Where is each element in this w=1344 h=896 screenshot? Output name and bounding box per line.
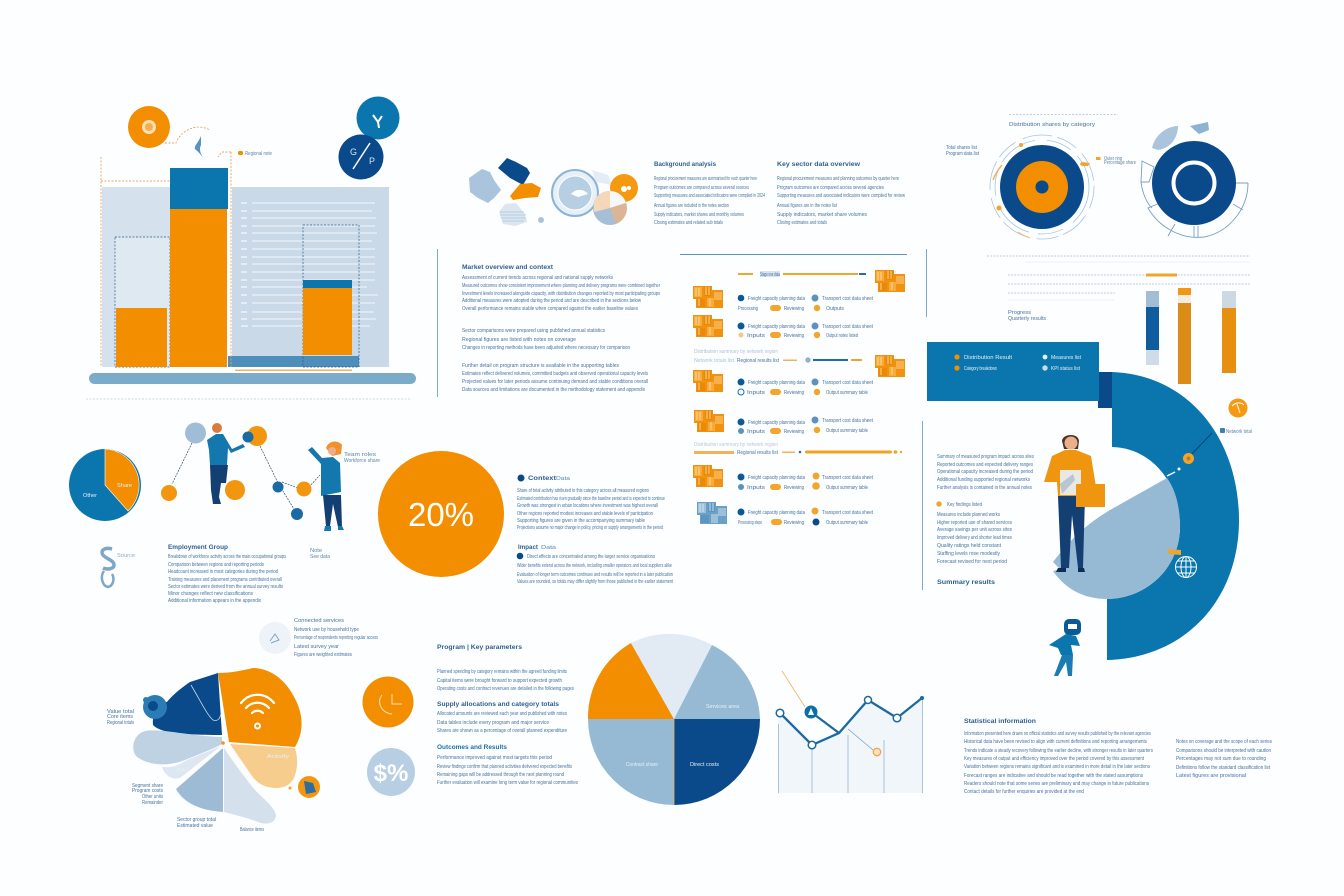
small caption — [1008, 310, 1046, 322]
sector: orange — [588, 643, 674, 719]
big percent circle — [378, 451, 504, 577]
row 4: Inputs — [747, 429, 765, 435]
text block: bottom centre: Allocated amounts are reviewed each year and published with notes — [437, 711, 567, 717]
callout label: Network total — [1226, 429, 1252, 435]
text block: percent details: Impact — [518, 544, 539, 551]
icon: s-shape label — [102, 548, 135, 587]
legend box: Measures list — [1051, 355, 1081, 361]
text block: left column: Changes in reporting methods have been adjusted where necessary for comparison — [462, 345, 630, 351]
top dotted header — [1009, 114, 1118, 128]
text block: right of figure: Higher reported use of shared services — [937, 520, 1012, 526]
text block: left column: Regional figures are listed with notes on coverage — [462, 337, 576, 343]
panel: logistics rows — [680, 254, 907, 526]
text block: percent details: Supporting figures are given in the accompanying summary table — [517, 518, 645, 524]
blue arc — [1107, 372, 1239, 660]
side note: Note — [310, 548, 322, 554]
text block: bottom centre: Review findings confirm that planned activities delivered expected benefits — [437, 764, 572, 770]
text block: bottom centre: Outcomes and Results — [437, 744, 507, 751]
text block: lower left: Training measures and placement programs contributed overall — [168, 577, 282, 583]
pie chart: small: Other — [83, 493, 97, 499]
timeline 3: Regional results list — [737, 450, 778, 456]
text block: top column 2: Supply indicators, market share volumes — [777, 212, 867, 218]
white row lines — [241, 203, 378, 326]
fan labels: Estimated value — [177, 823, 213, 829]
row 5: Inputs — [747, 485, 765, 491]
figure: small blue person — [1049, 619, 1081, 676]
fan labels — [107, 709, 264, 833]
row 2: Inputs — [747, 333, 765, 339]
small icon circle with notes: Percentage of respondents reporting regular access — [294, 635, 378, 641]
icon: dollar percent circle: $% — [374, 760, 408, 787]
orange ball icon — [288, 776, 320, 798]
text block: lower right — [964, 718, 1153, 795]
text block: left column: Sector comparisons were prepared using published annual statistics — [462, 328, 605, 334]
fan labels: Value total — [107, 709, 134, 715]
row 4: Freight capacity planning data — [748, 420, 806, 426]
pie chart: small: Share — [117, 483, 132, 489]
row 3: Reviewing — [784, 390, 804, 396]
row 4: Reviewing — [784, 429, 804, 435]
small caption: Progress — [1008, 310, 1031, 316]
side note — [310, 548, 331, 560]
donut 2 — [1152, 141, 1236, 225]
row 5: Transport cost data sheet — [822, 475, 873, 481]
figure label: Workforce share — [344, 458, 380, 464]
divider: dotted — [86, 398, 412, 400]
top dotted header: Distribution shares by category — [1009, 122, 1095, 128]
text block: lower right: Variation between regions remains significant and is examined in more detail in the later sections — [964, 764, 1150, 770]
pie chart: small — [69, 449, 141, 521]
text block: lower right: Trends indicate a steady recovery following the earlier decline, with stronger results in later quarters — [964, 748, 1153, 754]
text block: far right: Comparisons should be interpreted with caution — [1176, 748, 1271, 754]
area — [778, 698, 922, 793]
legend: donut 1: Outer ring — [1104, 156, 1122, 162]
text block: bottom centre: Remaining gaps will be addressed through the next planning round — [437, 772, 564, 778]
text block: percent details: Values are rounded, so totals may differ slightly from those published in the earlier statement — [517, 579, 673, 585]
donut 1 — [1000, 145, 1084, 229]
orange callout marks — [996, 143, 1100, 210]
donut 1 outer ring — [990, 135, 1094, 239]
sector: light left — [588, 719, 674, 805]
text block: lower right: Contact details for further enquiries are provided at the end — [964, 789, 1084, 795]
text block: percent details: Other regions reported modest increases and stable levels of participation — [517, 511, 653, 517]
figure label — [344, 452, 380, 464]
row 1: Reviewing — [784, 306, 804, 312]
legend box: Distribution Result — [964, 355, 1013, 361]
text block: top column 2 — [777, 161, 906, 226]
pie labels: Services area — [706, 704, 739, 710]
fan labels: Other units — [142, 794, 163, 800]
fan labels: Segment share — [132, 783, 163, 789]
crates: top right — [875, 270, 905, 292]
text block: left column: Data sources and limitations are documented in the methodology statement and appendix — [462, 387, 645, 393]
timeline 2: Network totals list — [694, 358, 734, 364]
sector: mid — [674, 645, 760, 719]
small pie — [593, 191, 627, 225]
text block: right of figure: Additional funding supported regional networks — [937, 477, 1030, 483]
orange header tab — [1146, 274, 1177, 276]
text block: top column 1: Closing estimates and related sub totals — [654, 220, 723, 226]
text block: lower left: Breakdown of workforce activity across the main occupational groups — [168, 554, 286, 560]
sector: pale — [631, 634, 712, 719]
figure: person with tablet — [1044, 435, 1105, 572]
vertical guides — [778, 698, 922, 793]
text block: left column: Projected values for later periods assume continuing demand and stable conditions overall — [462, 379, 648, 385]
row 5: Freight capacity planning data — [748, 475, 806, 481]
map: striped blob — [499, 203, 544, 226]
legend label — [238, 151, 272, 157]
pie labels: Direct costs — [690, 762, 719, 768]
row 2 — [693, 315, 873, 339]
text block: right of figure — [936, 454, 1034, 586]
text block: bottom centre: Program | Key parameters — [437, 644, 522, 651]
text block: lower left: Minor changes reflect new classifications — [168, 591, 253, 597]
fan labels: Core items — [107, 714, 133, 720]
sector: navy — [153, 673, 222, 735]
row 3: Inputs — [747, 390, 765, 396]
icon: wifi — [241, 695, 274, 728]
callout label — [1220, 428, 1252, 435]
small caption: Quarterly results — [1008, 316, 1046, 322]
text block: lower right: Readers should note that some series are preliminary and may change in future publications — [964, 781, 1149, 787]
text block: bottom centre: Further evaluation will examine long term value for regional communities — [437, 780, 578, 786]
sector: light blue — [133, 730, 222, 764]
text block: left column: Assessment of current trends across regional and national supply networks — [462, 275, 613, 281]
text block: percent details: Data — [541, 545, 557, 551]
text block: left column: Measured outcomes show consistent improvement where planning and delivery programs were combined together — [462, 283, 660, 289]
timeline 1: Stage one data — [760, 272, 780, 278]
icon: dollar percent circle — [367, 748, 415, 796]
row 4 — [694, 410, 873, 435]
markers — [776, 696, 924, 756]
text block: percent details: Context — [528, 475, 557, 482]
text block: lower left: Additional information appears in the appendix — [168, 598, 261, 604]
legend: donut 1 — [1104, 156, 1136, 166]
text block: percent details: Growth was strongest in urban locations where investment was highest overall — [517, 503, 658, 509]
pie labels: Contract share — [626, 762, 658, 768]
text block: percent details: Share of total activity attributed to this category across all measured regions — [517, 488, 649, 494]
row 6: Processing steps — [738, 520, 762, 526]
left label: Program data list — [946, 151, 979, 157]
orange circle — [610, 174, 638, 202]
text block: right of figure: Forecast revised for next period — [937, 559, 1007, 565]
text block: bottom centre: Operating costs and contract revenues are detailed in the following pages — [437, 686, 574, 692]
vertical bars — [1146, 288, 1236, 384]
nodes — [161, 422, 312, 520]
text block: top column 2: Regional procurement measures and planning outcomes by quarter here — [777, 176, 899, 182]
row 3 — [693, 370, 873, 396]
leader lines — [782, 671, 873, 750]
text block: right of figure: Summary results — [937, 579, 995, 586]
text block: far right: Latest figures are provisional — [1176, 773, 1246, 779]
text block: lower right: Forecast ranges are indicative and should be read together with the stated assumptions — [964, 773, 1143, 779]
panel: stacked bar chart — [89, 96, 416, 384]
sector: lightest blue — [224, 748, 276, 824]
pie chart: large — [588, 634, 760, 805]
text block: percent details: Data — [556, 476, 571, 482]
sector: orange — [218, 668, 302, 747]
text block: lower left: Headcount increased in most categories during the period — [168, 569, 278, 575]
text block: left column: Overall performance remains stable when compared against the earlier baseline values — [462, 306, 638, 312]
panel: blue half donut — [927, 342, 1252, 676]
text block: bottom centre: Shares are shown as a percentage of overall planned expenditure — [437, 728, 567, 734]
text block: top column 1 — [654, 161, 765, 226]
icon: s-shape label: Source — [117, 553, 135, 559]
peach label: Activity — [267, 754, 289, 760]
crates: middle right — [875, 355, 905, 377]
text block: right of figure: Measures include planned works — [937, 512, 1000, 518]
text block: left column: Market overview and context — [462, 264, 554, 271]
left label — [946, 145, 979, 157]
text block: right of figure: Average savings per unit across sites — [937, 527, 1012, 533]
text block: right of figure: Quality ratings held constant — [937, 543, 1001, 549]
icon: navy percent circle: G — [350, 147, 357, 157]
text block: top column 2: Supporting measures and associated indicators were compiled for review — [777, 193, 906, 199]
text block: bottom centre: Planned spending by category remains within the agreed funding limits — [437, 669, 567, 675]
text block: lower right: Information presented here draws on official statistics and survey results published by the relevant agencies — [964, 731, 1151, 737]
row 5: Reviewing — [784, 485, 804, 491]
sector: navy — [674, 719, 760, 805]
row 1: Freight capacity planning data — [748, 296, 806, 302]
header rule — [680, 254, 907, 256]
text block: percent details: Estimated contribution has risen gradually since the baseline period and is expected to continue — [517, 496, 665, 502]
map: orange blob — [510, 183, 541, 200]
icon: orange badge — [1228, 398, 1248, 418]
text block: top column 1: Background analysis — [654, 161, 716, 168]
fan labels: Program costs — [132, 788, 163, 794]
tab label: Value — [175, 767, 185, 773]
fan labels: Sector group total — [177, 817, 216, 823]
row 1: Outputs — [826, 306, 844, 312]
text block: lower right: Statistical information — [964, 718, 1036, 725]
text block: top column 1: Supporting measures and associated indicators were compiled in 2024 — [654, 193, 765, 199]
small icon circle with notes: Network use by household type — [294, 627, 359, 633]
seam — [673, 719, 675, 805]
timeline 3 — [694, 442, 902, 456]
dotted guides — [101, 127, 231, 367]
row 2: Output notes listed — [826, 333, 858, 339]
text block: top column 2: Key sector data overview — [777, 161, 861, 168]
row 5: Output summary table — [826, 485, 868, 491]
text block: left column: Further detail on program structure is available in the supporting tables — [462, 363, 619, 369]
orange tag — [1167, 549, 1181, 555]
row 2: Transport cost data sheet — [822, 324, 873, 330]
icon: navy percent circle: P — [369, 156, 375, 166]
row 2: Reviewing — [784, 333, 804, 339]
pie labels — [626, 704, 739, 768]
dotted rule rows — [987, 256, 1250, 300]
baseline bar — [89, 370, 416, 384]
text block: percent details: Direct effects are concentrated among the larger service organisations — [527, 554, 655, 560]
text block: right of figure: Improved delivery and shorter lead times — [937, 535, 1012, 541]
small icon circle with notes — [259, 618, 378, 658]
vertical rule — [436, 249, 438, 397]
icon: bird mark — [195, 136, 203, 158]
legend: donut 1: Percentage share — [1104, 160, 1136, 166]
text block: lower left: Comparison between regions and reporting periods — [168, 562, 264, 568]
text block: lower left: Sector estimates were derived from the annual survey results — [168, 584, 283, 590]
icon: navy percent circle — [338, 134, 384, 180]
icon: orange circle — [128, 106, 170, 148]
icon: blue circle — [356, 96, 400, 140]
sector: lighter tab — [162, 746, 221, 779]
text block: right of figure: Further analysis is contained in the annual notes — [937, 485, 1032, 491]
chart backdrop — [102, 187, 389, 367]
legend box: Category breakdown — [964, 366, 997, 372]
row 6: Freight capacity planning data — [748, 510, 806, 516]
bottom blue band — [228, 356, 359, 367]
row 3: Freight capacity planning data — [748, 380, 806, 386]
timeline 2: Distribution summary by network region — [694, 349, 778, 355]
row 6 — [697, 502, 873, 526]
panel: donut charts — [946, 114, 1250, 384]
secondary segment — [811, 712, 839, 733]
donut 2 map fragment — [1152, 122, 1209, 150]
text block: bottom centre: Performance improved against most targets this period — [437, 755, 552, 761]
text block: top column 1: Annual figures are included in the notes section — [654, 203, 729, 209]
text block: bottom centre: Capital items were brought forward to support expected growth — [437, 678, 562, 684]
row 1 — [693, 286, 873, 312]
fan labels: Regional totals — [107, 720, 134, 726]
navy inner curve — [191, 685, 221, 721]
row 3: Transport cost data sheet — [822, 380, 873, 386]
network lines — [172, 443, 320, 514]
map: light blob — [469, 169, 501, 203]
text block: lower right: Historical data have been revised to align with current definitions and reporting arrangements — [964, 739, 1147, 745]
text block: right of figure: Summary of measured program impact across sites — [937, 454, 1034, 460]
text block: percent details — [517, 474, 673, 585]
row 5 — [693, 465, 873, 491]
text block: top column 2: Closing estimates and totals — [777, 220, 827, 226]
bar: tall — [170, 168, 228, 367]
text block: lower left: Employment Group — [168, 544, 228, 551]
text block: right of figure: Operational capacity increased during the period — [937, 469, 1033, 475]
text block: top column 2: Program outcomes are compared across several agencies — [777, 185, 884, 191]
text block: left column: Estimates reflect delivered volumes, committed budgets and observed operational capacity levels — [462, 371, 648, 377]
figure: man — [207, 423, 245, 504]
icon: orange phone circle — [362, 676, 414, 728]
small icon circle with notes: Figures are weighted estimates — [294, 652, 352, 658]
row 1: Processing — [738, 306, 758, 312]
network with people — [161, 422, 380, 531]
sector: mid blue — [176, 748, 223, 812]
panel: fan chart — [107, 668, 320, 833]
gear icon — [143, 695, 167, 719]
text block: top column 1: Program outcomes are compared across several sources — [654, 185, 749, 191]
big percent circle: 20% — [408, 496, 474, 533]
side note: See data — [310, 554, 331, 560]
text block: top column 1: Supply indicators, market shares and monthly volumes — [654, 212, 744, 218]
hub dot — [221, 741, 225, 745]
world map icons — [469, 158, 638, 226]
globe ring — [552, 170, 612, 216]
left label: Total shares list — [946, 145, 977, 151]
text block: far right: Notes on coverage and the scope of each series — [1176, 739, 1272, 745]
row 4: Output summary table — [826, 428, 868, 434]
text block: lower right: Key measures of output and efficiency improved over the period covered by this assessment — [964, 756, 1144, 762]
light sector — [1053, 478, 1180, 599]
row 1: Transport cost data sheet — [822, 296, 873, 302]
notch — [1098, 372, 1112, 408]
timeline 2: Regional results list — [737, 358, 779, 364]
text block: top column 2: Annual figures are in the notes list — [777, 203, 837, 209]
icon: globe — [1176, 556, 1196, 578]
legend label: Regional note — [245, 151, 272, 157]
small icon circle with notes: Connected services — [294, 618, 344, 624]
text block: bottom centre: Supply allocations and category totals — [437, 701, 559, 708]
map: navy blob — [498, 158, 530, 185]
timeline 3: Distribution summary by network region — [694, 442, 778, 448]
text block: bottom centre: Data tables include every program and major service — [437, 720, 549, 726]
bar: left — [115, 237, 170, 367]
row 2: Freight capacity planning data — [748, 324, 806, 330]
text block: far right: Percentages may not sum due to rounding — [1176, 756, 1266, 762]
text block: right of figure: Staffing levels rose modestly — [937, 551, 1000, 557]
text block: far right: Definitions follow the standard classification list — [1176, 765, 1270, 771]
text block: left column — [462, 264, 660, 393]
text block: left column: Investment levels increased alongside capacity, with distribution changes reported by most participating groups — [462, 291, 660, 297]
text block: left column: Additional measures were adopted during the period and are described in the sections below — [462, 298, 642, 304]
row 3: Output summary table — [826, 390, 868, 396]
legend box: KPI status list — [1051, 366, 1080, 372]
line — [780, 698, 922, 745]
vertical rules — [922, 249, 926, 590]
text block: top column 1: Regional procurement measures are summarised for each quarter here — [654, 176, 757, 182]
legend box — [927, 342, 1099, 401]
small icon circle with notes: Latest survey year — [294, 644, 339, 650]
donut 2 outer arcs — [1141, 161, 1248, 237]
text block: percent details: Evaluation of longer term outcomes continues and results will be reported in a later publication — [517, 572, 673, 578]
figure label: Team roles — [344, 452, 376, 458]
text block: lower left — [168, 544, 286, 604]
callout leader — [1167, 433, 1212, 476]
timeline 2 — [694, 349, 862, 364]
text block: right of figure: Key findings listed — [947, 502, 982, 508]
text block: far right — [1176, 739, 1272, 779]
row 6: Reviewing — [784, 520, 804, 526]
figure: woman — [308, 442, 344, 531]
row 6: Transport cost data sheet — [822, 510, 873, 516]
text block: percent details: Projections assume no major change in policy, pricing or supply arrangements in the period — [517, 525, 663, 531]
fan labels: Remainder — [142, 800, 163, 806]
row 6: Output summary table — [826, 520, 868, 526]
row 4: Transport cost data sheet — [822, 418, 873, 424]
text block: right of figure: Reported outcomes and expected delivery ranges — [937, 462, 1033, 468]
fan labels: Balance items — [240, 827, 264, 833]
timeline 1 — [738, 271, 866, 278]
text block: bottom centre — [437, 644, 578, 786]
text block: percent details: Wider benefits extend across the network, including smaller operators and local suppliers alike — [517, 563, 672, 569]
sector: peach — [230, 744, 297, 788]
line chart — [776, 671, 924, 793]
bar: right — [303, 225, 359, 367]
